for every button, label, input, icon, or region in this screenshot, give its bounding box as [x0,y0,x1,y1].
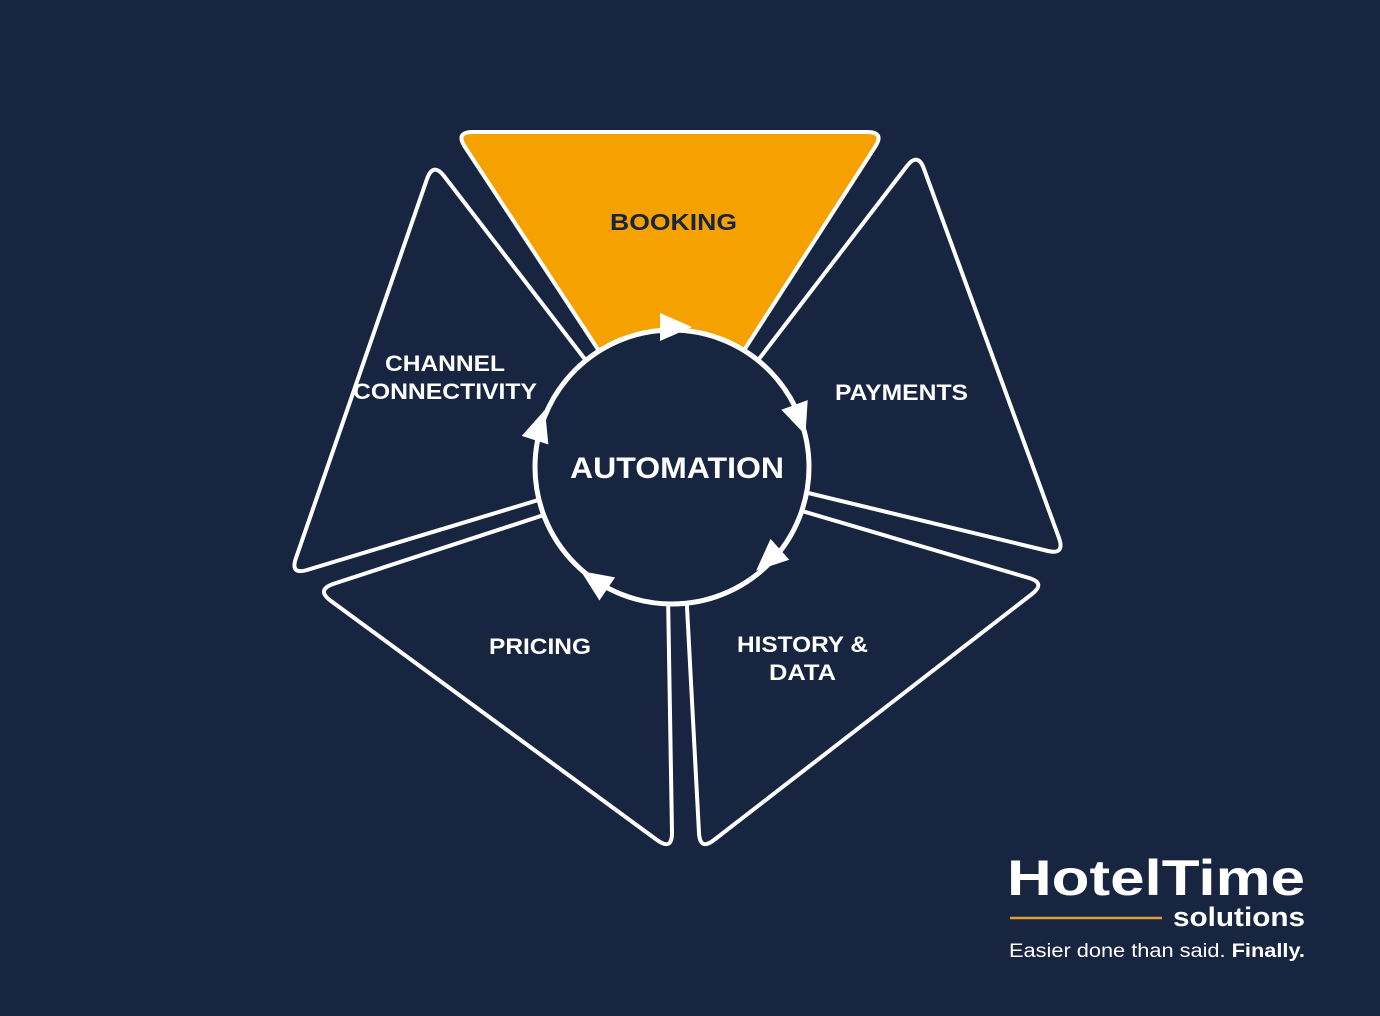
label: history & data: DATA [769,660,836,685]
logo: HotelTime solutions: solutions [1173,902,1305,932]
panel: booking [461,132,879,462]
label: history & data: HISTORY & [737,632,868,657]
label: booking: BOOKING [610,209,737,235]
label: channel connectivity: CONNECTIVITY [353,379,537,404]
label: payments: PAYMENTS [835,380,968,405]
panel: history & data [680,475,1038,844]
panel: pricing [324,475,672,844]
label: pricing: PRICING [489,634,591,659]
center circle: automation [535,330,809,604]
panel: payments [680,160,1061,552]
arrows: cycle [522,313,819,601]
label: channel connectivity: CHANNEL [385,351,505,376]
label: automation: AUTOMATION [570,452,784,485]
logo: HotelTime solutions [1007,850,1305,962]
tagline: Easier done than said. Finally. [1009,941,1305,962]
logo: HotelTime solutions: HotelTime [1007,850,1305,906]
panel: channel connectivity [294,170,664,571]
